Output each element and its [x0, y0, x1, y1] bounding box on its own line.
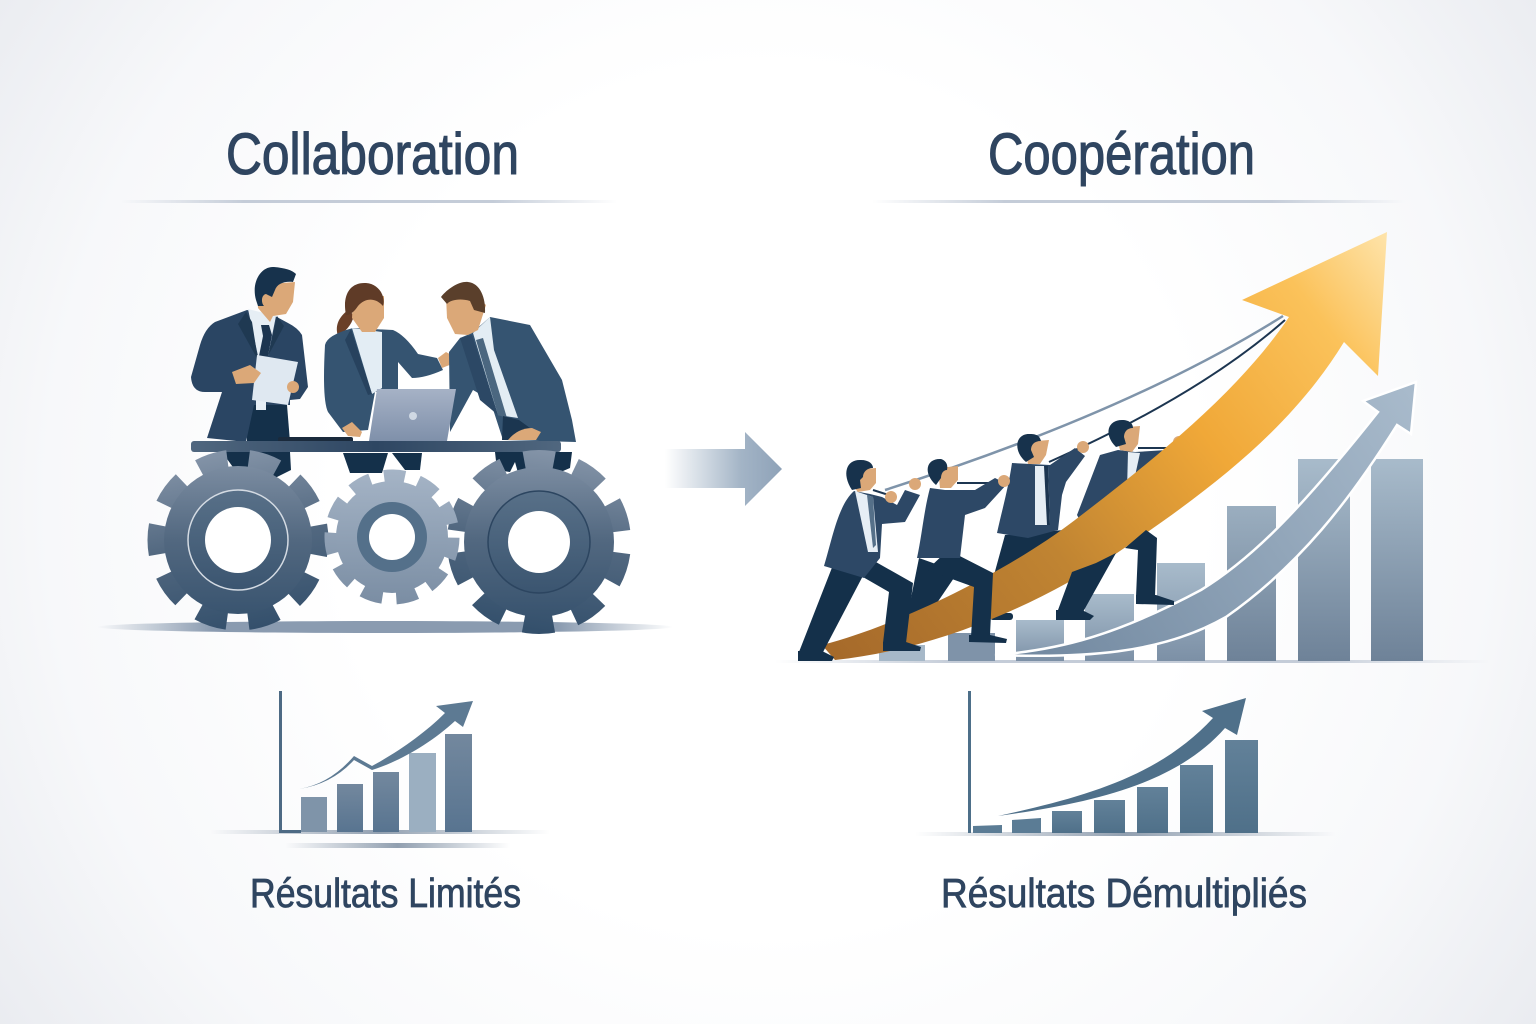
table with laptop [191, 389, 561, 452]
ropes [873, 316, 1285, 497]
small bar chart: multiplied results [915, 691, 1335, 836]
figure: woman [324, 283, 457, 473]
laptop [369, 389, 456, 441]
figure: fourth puller [1077, 420, 1185, 530]
gear left [144, 446, 332, 634]
ground line [775, 660, 1490, 663]
small bar chart: limited results [210, 691, 550, 848]
orange growth arrow [822, 232, 1387, 660]
gear centre [331, 476, 453, 598]
label: Résultats Limités: Résultats Limités [250, 870, 521, 916]
figure: fourth puller legs [1056, 530, 1174, 620]
trend arrow [998, 698, 1246, 816]
panel: collaboration [97, 122, 673, 916]
document [252, 355, 298, 405]
label: Résultats Démultipliés: Résultats Démultipliés [941, 870, 1307, 916]
grey growth arrow [995, 382, 1416, 656]
heading: Coopération: Coopération [988, 122, 1255, 187]
figure: man with document [191, 267, 308, 478]
heading: Collaboration: Collaboration [226, 122, 519, 187]
gear right [446, 449, 632, 635]
figure: third puller [990, 434, 1089, 620]
figure: second puller [917, 459, 1010, 643]
arrow: collaboration to cooperation [665, 432, 782, 506]
figure: first puller [798, 460, 921, 661]
panel: cooperation [775, 122, 1490, 916]
ground shadow under gears [97, 621, 673, 633]
figure: second puller back leg [908, 558, 958, 625]
trend arrow [299, 701, 473, 789]
figure: man leaning [441, 282, 576, 480]
rising bars [879, 459, 1423, 661]
